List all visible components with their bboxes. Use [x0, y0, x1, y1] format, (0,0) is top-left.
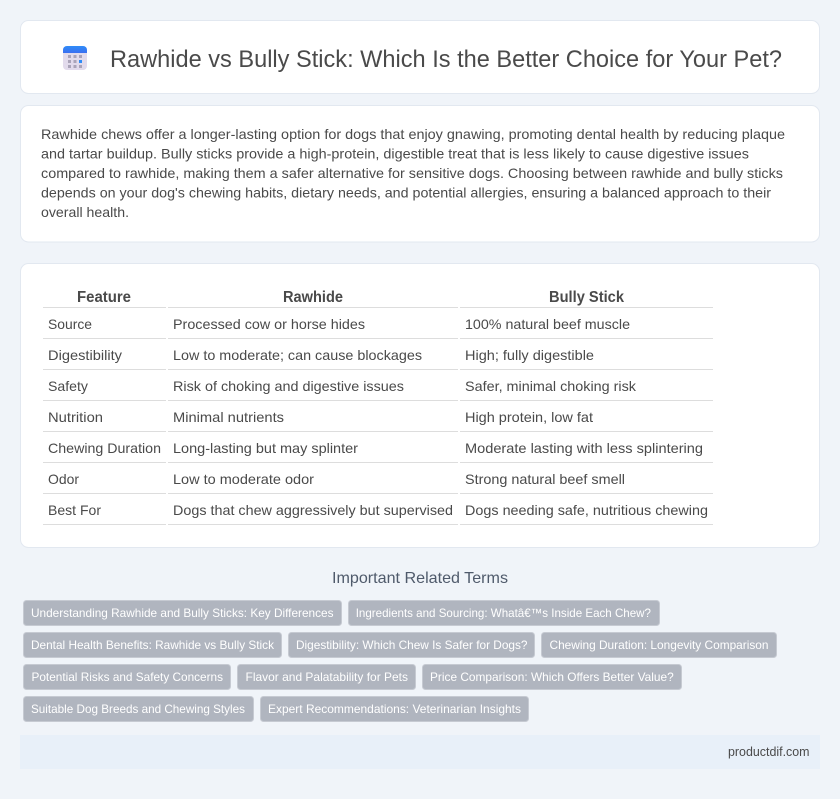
row: source: 100% natural beef muscle — [465, 316, 630, 332]
heading: important related terms: Important Related Terms — [332, 570, 508, 587]
tag — [24, 696, 254, 722]
row: best for: Best For — [48, 502, 101, 518]
intro text: and tartar buildup. Bully sticks provide a high-protein, digestible treat that is less likely to cause digestive issues — [41, 146, 749, 162]
row: best for: Dogs that chew aggressively but supervised — [173, 502, 453, 518]
tag: Dental Health Benefits: Rawhide vs Bully Stick — [31, 638, 275, 652]
tag: Potential Risks and Safety Concerns — [32, 670, 223, 684]
panel: introduction — [20, 106, 820, 242]
row: digestibility: Digestibility — [48, 347, 122, 363]
row: source: Source — [48, 316, 92, 332]
row: nutrition: Nutrition — [48, 409, 103, 425]
tag: Digestibility: Which Chew Is Safer for Dogs? — [296, 638, 528, 652]
table header row — [77, 289, 624, 306]
intro text — [41, 126, 785, 220]
row: safety: Safety — [48, 378, 88, 394]
table header row: Bully Stick — [549, 289, 624, 306]
tag: Ingredients and Sourcing: Whatâ€™s Inside Each Chew? — [356, 606, 651, 620]
tag: Expert Recommendations: Veterinarian Insights — [268, 702, 521, 716]
row: best for — [48, 502, 708, 518]
tag — [24, 600, 342, 626]
table header row: Feature — [77, 289, 131, 306]
footer — [20, 735, 820, 769]
row: odor: Odor — [48, 471, 79, 487]
title: Rawhide vs Bully Stick: Which Is the Better Choice for Your Pet? — [110, 46, 782, 73]
tag — [260, 696, 528, 722]
row: source — [48, 316, 630, 332]
tag — [422, 664, 682, 690]
table header row: Rawhide — [283, 289, 343, 306]
tag — [238, 664, 416, 690]
tag: Flavor and Palatability for Pets — [246, 670, 408, 684]
row: safety: Risk of choking and digestive issues — [173, 378, 404, 394]
tag: Understanding Rawhide and Bully Sticks: Key Differences — [31, 606, 334, 620]
row: digestibility — [48, 347, 594, 363]
row: nutrition: High protein, low fat — [465, 409, 593, 425]
row: safety — [48, 378, 637, 394]
tag: Chewing Duration: Longevity Comparison — [550, 638, 768, 652]
row: chewing duration — [48, 440, 703, 456]
tag: Price Comparison: Which Offers Better Value? — [430, 670, 674, 684]
row: source: Processed cow or horse hides — [173, 316, 365, 332]
row: nutrition: Minimal nutrients — [173, 409, 284, 425]
row: chewing duration: Long-lasting but may splinter — [173, 440, 358, 456]
panel: comparison table — [20, 264, 820, 548]
row: digestibility: Low to moderate; can cause blockages — [173, 347, 422, 363]
footer source: productdif.com — [728, 744, 810, 759]
intro text: Rawhide chews offer a longer-lasting option for dogs that enjoy gnawing, promoting dental health by reducing plaque — [41, 126, 785, 142]
row: best for: Dogs needing safe, nutritious chewing — [465, 502, 708, 518]
row: odor: Low to moderate odor — [173, 471, 314, 487]
tag — [24, 664, 230, 690]
panel: header — [20, 20, 820, 94]
tag — [542, 632, 776, 658]
row: odor — [48, 471, 625, 487]
row: chewing duration: Chewing Duration — [48, 440, 161, 456]
tag — [348, 600, 660, 626]
row: chewing duration: Moderate lasting with less splintering — [465, 440, 703, 456]
row: nutrition — [48, 409, 593, 425]
intro text: overall health. — [41, 204, 129, 220]
tag: Suitable Dog Breeds and Chewing Styles — [31, 702, 245, 716]
row: safety: Safer, minimal choking risk — [465, 378, 637, 394]
row: digestibility: High; fully digestible — [465, 347, 594, 363]
related term tags — [24, 600, 776, 722]
intro text: compared to rawhide, making them a safer alternative for sensitive dogs. Choosing between rawhide and bully sticks — [41, 165, 783, 181]
tag — [24, 632, 282, 658]
row: odor: Strong natural beef smell — [465, 471, 625, 487]
icon: calendar — [63, 46, 87, 70]
tag — [288, 632, 534, 658]
intro text: depends on your dog's chewing habits, dietary needs, and potential allergies, ensuring a balanced approach to their — [41, 184, 771, 200]
